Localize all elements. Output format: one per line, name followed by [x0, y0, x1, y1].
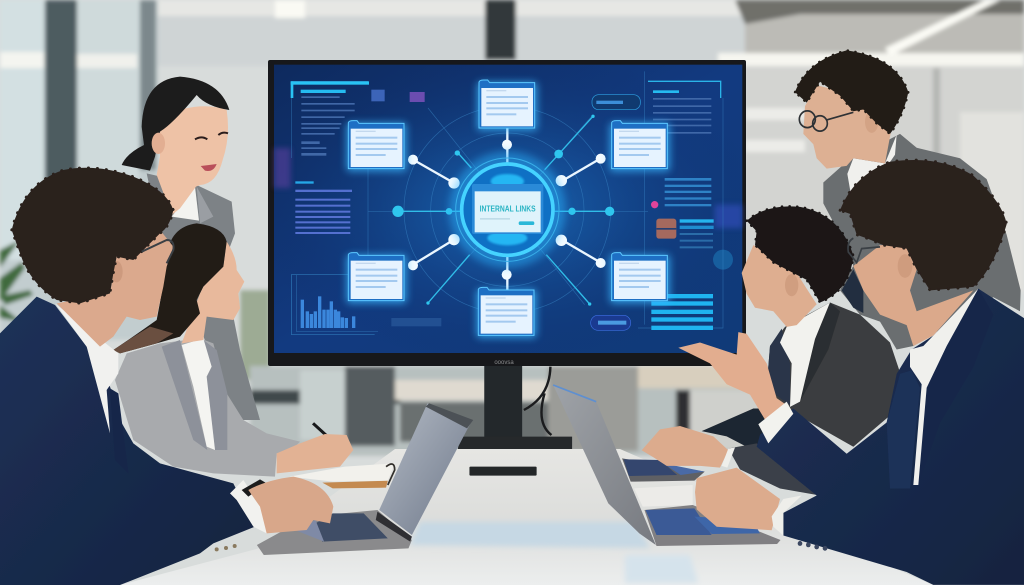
phone on table	[469, 467, 537, 476]
wall monitor with internal links network	[268, 60, 746, 455]
front left man shirt	[55, 303, 118, 433]
seated woman lapels	[162, 340, 227, 450]
right text panel	[592, 81, 721, 248]
hub ring with INTERNAL LINKS card: INTERNAL LINKS	[480, 204, 536, 214]
monitor brand label: ooovsa	[494, 360, 514, 366]
man seated front left	[0, 168, 333, 585]
front left man cuff and watch	[230, 480, 267, 533]
paper on table	[634, 485, 693, 507]
hub ring with INTERNAL LINKS card	[449, 151, 566, 268]
foreground man shirt	[910, 289, 978, 485]
seated woman shirt	[182, 338, 215, 450]
seated man shirt	[780, 303, 830, 407]
foreground man suit	[757, 289, 1024, 585]
man foreground right	[678, 160, 1024, 585]
standing man glasses	[799, 111, 853, 131]
foreground man ear	[898, 254, 912, 278]
standing woman shirt	[172, 187, 199, 221]
hub connectors and nodes	[392, 115, 614, 306]
laptop right	[553, 385, 781, 546]
seated man sleeve	[702, 409, 813, 450]
laptop left	[257, 403, 473, 555]
standing man hair	[795, 50, 908, 134]
front left man sleeve buttons	[215, 544, 237, 551]
front left man hair	[12, 168, 173, 303]
standing woman jacket	[147, 173, 260, 420]
seated woman hair	[113, 223, 227, 353]
seated man hand	[642, 426, 728, 468]
seated woman face	[182, 242, 244, 343]
page card: bottom	[476, 287, 537, 338]
front left man ear	[111, 261, 123, 282]
raised open hand	[678, 332, 787, 422]
raised arm cuff	[758, 402, 793, 443]
front left man glasses	[142, 240, 174, 263]
table	[120, 449, 933, 585]
man standing at right	[795, 50, 1021, 349]
seated man ear	[785, 274, 798, 296]
standing man jacket	[823, 134, 1021, 349]
page card: bottom right	[610, 253, 670, 303]
seated man hair	[747, 206, 853, 303]
foreground man glasses	[848, 238, 880, 263]
standing woman facial features	[152, 133, 228, 171]
foreground man hair	[840, 160, 1007, 290]
pen	[313, 423, 330, 439]
circuit lines	[291, 71, 723, 331]
seated woman jacket	[115, 338, 300, 477]
front left man suit	[0, 297, 255, 585]
notebook	[290, 463, 395, 488]
seated man jacket	[767, 303, 899, 447]
seated man face	[742, 245, 817, 327]
monitor bezel	[268, 60, 746, 366]
standing man ear	[865, 111, 878, 133]
bottom right bars and pill	[591, 294, 713, 330]
left text panel	[291, 81, 425, 234]
table screen reflection	[410, 522, 650, 548]
bar chart on screen	[291, 275, 441, 335]
monitor screen	[274, 65, 742, 353]
man seated right	[642, 206, 899, 495]
woman standing at left	[122, 77, 260, 420]
seated woman hand	[277, 434, 353, 473]
front left man hand	[248, 477, 333, 533]
woman seated at left	[113, 223, 353, 477]
foreground man face	[853, 245, 973, 346]
standing woman face	[157, 106, 228, 215]
foreground man sleeve buttons	[798, 541, 827, 551]
resting arm cuff	[772, 495, 802, 535]
tabletop objects	[257, 385, 781, 555]
page card: bottom left	[346, 253, 407, 303]
seated man cuff	[722, 448, 735, 468]
page card: top left	[346, 121, 407, 171]
standing man face	[803, 85, 891, 169]
standing woman hair	[122, 77, 229, 171]
standing man shirt	[847, 135, 897, 193]
page card: top	[477, 80, 537, 131]
front left man face	[57, 230, 173, 347]
monitor stand	[457, 363, 572, 455]
page card: top right	[610, 121, 670, 171]
resting hand	[695, 468, 780, 530]
laptop back right	[622, 458, 705, 482]
